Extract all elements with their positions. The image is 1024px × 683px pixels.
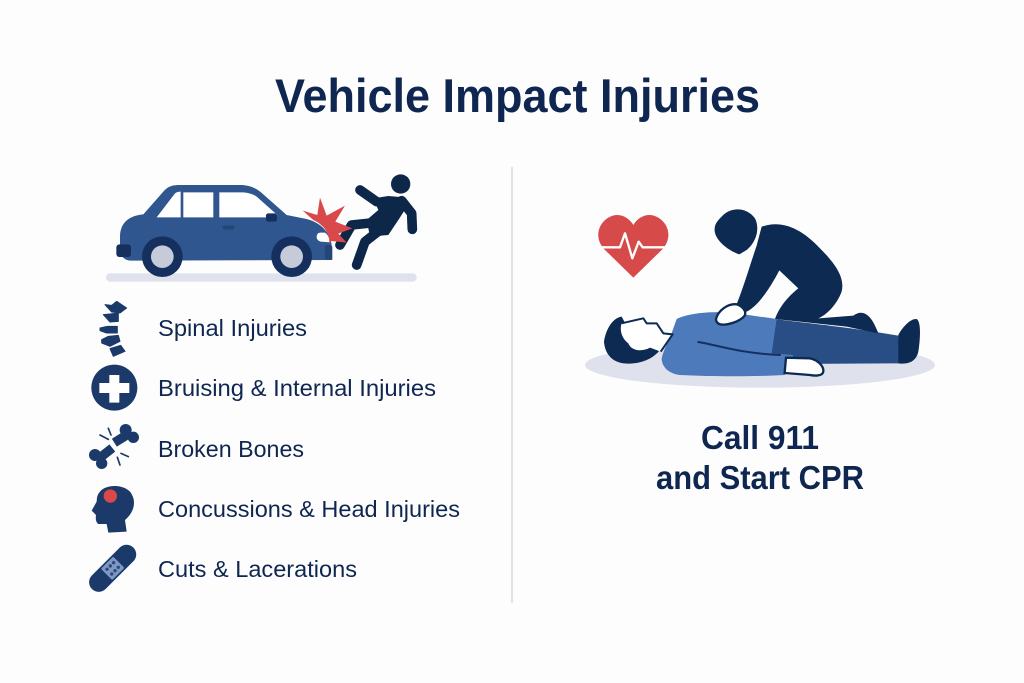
- car: [106, 185, 417, 282]
- injury item: cuts and lacerations: [85, 541, 357, 596]
- injury item: spinal injuries: [100, 301, 307, 356]
- falling pedestrian: [340, 174, 412, 265]
- icon: head with red spot: [92, 486, 134, 533]
- injury item: concussions and head injuries: Concussions & Head Injuries: [158, 496, 460, 522]
- injury item: spinal injuries: Spinal Injuries: [158, 315, 307, 341]
- title: Vehicle Impact Injuries: [275, 69, 760, 122]
- icon: spine: [100, 301, 127, 356]
- illustration: car hitting pedestrian: [106, 174, 417, 282]
- injury item: cuts and lacerations: Cuts & Lacerations: [158, 556, 357, 582]
- injury item: bruising and internal injuries: [91, 365, 436, 411]
- impact burst: [303, 198, 352, 243]
- icon: broken bone: [89, 424, 139, 469]
- call to action text: [656, 419, 864, 496]
- icon: heart with pulse: [598, 215, 668, 278]
- icon: bandage: [85, 541, 140, 596]
- injury item: broken bones: [89, 424, 304, 469]
- call to action text: Call 911: [701, 419, 819, 456]
- illustration: CPR scene: [585, 209, 935, 388]
- call to action text: and Start CPR: [656, 459, 864, 496]
- injury item: concussions and head injuries: [92, 486, 460, 533]
- injury item: bruising and internal injuries: Bruising & Internal Injuries: [158, 375, 436, 401]
- injury item: broken bones: Broken Bones: [158, 436, 304, 462]
- icon: medical cross: [91, 365, 137, 411]
